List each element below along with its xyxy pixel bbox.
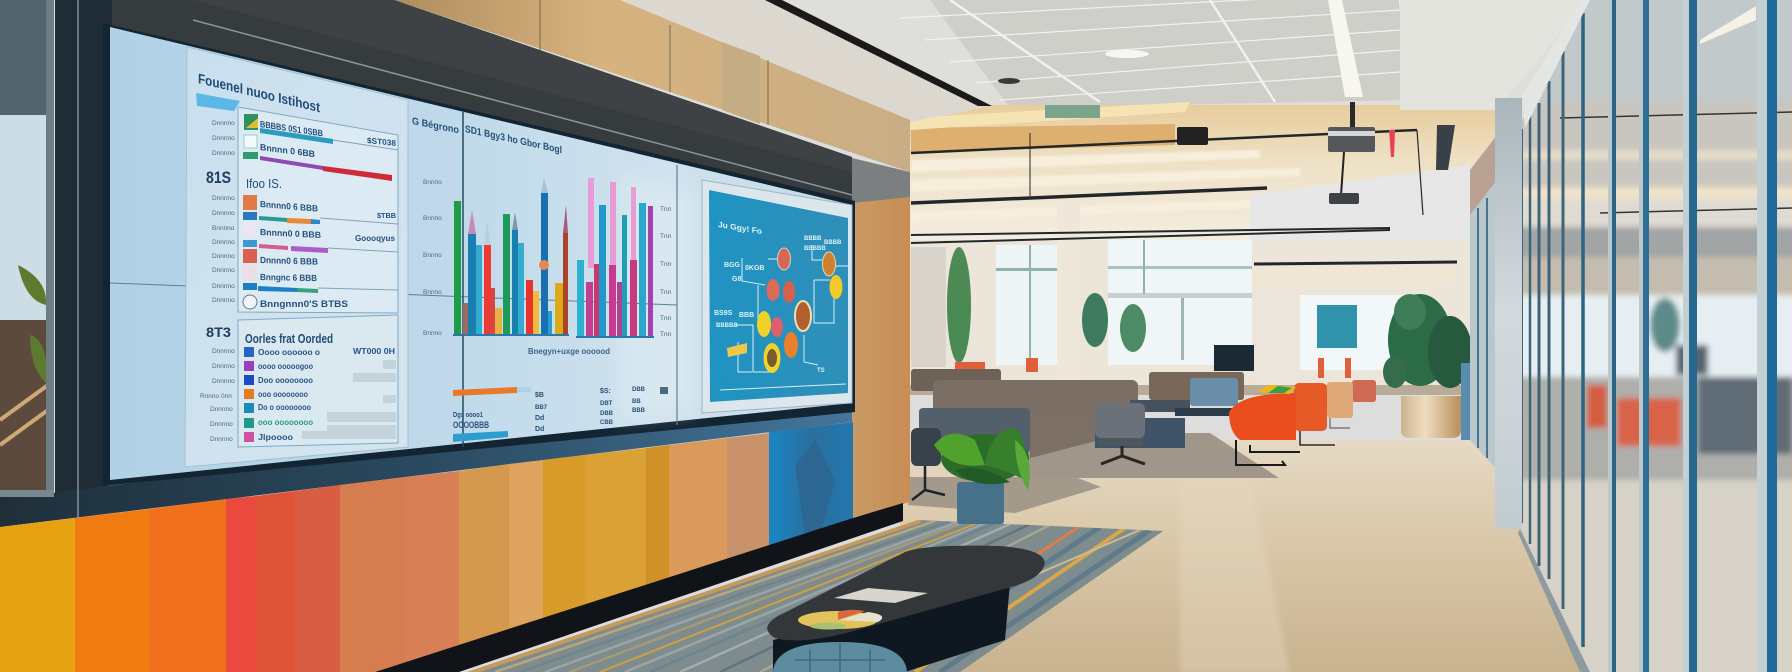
- inset frame: [702, 180, 852, 413]
- inset labels: BBBBB: [804, 246, 826, 252]
- dark chair behind plant: [911, 428, 945, 500]
- panel: process map inset: [702, 180, 852, 413]
- window A: [996, 245, 1057, 365]
- seam: [77, 0, 79, 672]
- y axis labels: Dnnnno: [212, 253, 235, 260]
- row text: $ST038: [367, 136, 397, 148]
- screen seam horizontal: [110, 283, 677, 305]
- axis labels: Tnn: [660, 289, 672, 296]
- heading: card title: Fouenel nuoo Istihost: [198, 71, 320, 116]
- left dark frame: [0, 0, 112, 527]
- y axis labels: Dnnnno: [212, 195, 235, 202]
- back red seats: [955, 358, 1351, 378]
- y axis labels: Dnnnno: [210, 436, 233, 443]
- y axis labels: [200, 120, 235, 443]
- summary light bar: [517, 387, 531, 392]
- floor: [900, 440, 1600, 672]
- bench top: [767, 546, 1045, 640]
- header beam: [1252, 262, 1457, 290]
- ceiling grid panel: [900, 0, 1410, 108]
- glass mullions: [1522, 0, 1777, 672]
- screen seam vertical: [462, 112, 464, 447]
- axis labels: Tnn: [660, 233, 672, 240]
- monitor: [1214, 345, 1254, 371]
- sub card one: [238, 107, 398, 313]
- warm ceiling light bands: [911, 150, 1300, 222]
- red chair back: [1294, 383, 1335, 445]
- blue panel abstract shape: [795, 440, 835, 535]
- tree two: [1120, 304, 1146, 352]
- stair rails: [0, 385, 48, 445]
- summary text: Dgs oooo1: [453, 412, 483, 419]
- lounge rug: [1000, 433, 1279, 478]
- summary text: BB7: [535, 405, 548, 411]
- rug: [460, 515, 1170, 672]
- metal column: [1495, 98, 1522, 529]
- gold planter: [1401, 396, 1461, 438]
- ceiling downlight: [998, 78, 1020, 84]
- dark wall upper band: [55, 0, 852, 205]
- upper right ceiling wash: [1400, 0, 1587, 110]
- legend text: ooo oooooooo: [258, 390, 308, 399]
- y axis labels: Bnnnno: [212, 225, 235, 232]
- legend squares: [244, 347, 254, 442]
- tag: [196, 93, 240, 111]
- inset labels: BGG: [724, 262, 740, 269]
- projector three: [1329, 193, 1359, 204]
- display screen: [103, 23, 855, 486]
- front rug: [908, 477, 1101, 513]
- ceiling: [700, 0, 1792, 130]
- row text: Bnngnnn0'S BTBS: [260, 299, 348, 309]
- row icons: [243, 114, 258, 309]
- inset labels: G8: [732, 276, 741, 283]
- wood column: [852, 197, 910, 518]
- reflected rail lower: [1600, 208, 1792, 213]
- summary text: Dd: [535, 426, 544, 433]
- y axis labels: Dnnnno: [212, 297, 235, 304]
- legend text: Doo oooooooo: [258, 376, 313, 385]
- axis labels: Tnn: [660, 331, 672, 338]
- summary text: DBB: [600, 411, 614, 417]
- inset labels: BBBBB: [716, 323, 738, 329]
- colored wall panels: [0, 422, 853, 672]
- glass bottom rail: [1518, 529, 1590, 672]
- axis labels: Bnnno: [423, 330, 442, 337]
- axis labels: Bnnno: [423, 252, 442, 259]
- summary orange bar: [453, 387, 517, 396]
- axis labels: Tnn: [660, 315, 672, 322]
- salmon wall section: [1470, 135, 1497, 215]
- inset labels: BBBB: [804, 236, 822, 242]
- screen glare: [620, 175, 695, 420]
- summary text: OOOOBBB: [453, 420, 489, 430]
- inset labels: TS: [817, 368, 825, 374]
- row text: BBBBS 0S1 0SBB: [260, 119, 323, 138]
- big figure one: 81S: [206, 168, 231, 187]
- far glass wall: [1470, 180, 1497, 470]
- y axis labels: Dnnnno: [212, 363, 235, 370]
- axis labels: Tnn: [660, 261, 672, 268]
- y axis labels: Dnnnno: [212, 120, 235, 127]
- bars group one: [453, 178, 569, 335]
- summary text: DBT: [600, 401, 613, 407]
- stone column: [911, 247, 946, 367]
- pillar: [1057, 200, 1080, 380]
- row text: [260, 119, 397, 309]
- summary text: $B: [535, 392, 544, 399]
- floor reflection: [1180, 480, 1290, 672]
- axis labels: Bnnno: [423, 179, 442, 186]
- legend text: [258, 347, 395, 442]
- summary text: Dd: [535, 415, 544, 422]
- ceiling spotlight: [1105, 50, 1149, 58]
- chart title two: SD1 Bgy3 ho Gbor Bogl: [465, 124, 562, 156]
- screen bezel: [103, 23, 855, 486]
- row text: Goooqyus: [355, 233, 395, 243]
- back wall and windows: [905, 200, 1495, 395]
- axis labels: [423, 179, 672, 338]
- row heading: Ifoo IS.: [246, 176, 282, 191]
- reflected monitor: [1676, 345, 1708, 375]
- tall plant: [1383, 294, 1472, 388]
- back sofa left: [911, 369, 1001, 391]
- y axis labels: Dnnnno: [212, 135, 235, 142]
- y axis labels: Dnnnno: [212, 348, 235, 355]
- y axis labels: Dnnnno: [212, 239, 235, 246]
- speckled vent: [722, 42, 760, 124]
- y axis labels: Dnnnno: [210, 406, 233, 413]
- y axis labels: Dnnnno: [210, 421, 233, 428]
- screen surface: [110, 27, 852, 480]
- chart caption: Bnegyn+uxge oooood: [528, 347, 610, 356]
- warm back ceiling: [905, 105, 1505, 245]
- heading: sub card two: Oorles frat Oorded: [245, 331, 333, 346]
- axis labels: Bnnno: [423, 215, 442, 222]
- legend text: ooo oooooooo: [258, 418, 313, 427]
- blue stool: [773, 642, 907, 672]
- inset labels: BBBB: [824, 240, 842, 246]
- node circles: [757, 248, 842, 373]
- bench: [767, 546, 1045, 672]
- glass partition wall: [1500, 0, 1792, 672]
- row text: Bnngnc 6 BBB: [260, 272, 317, 283]
- sub card two: [238, 315, 398, 447]
- reflected tree: [1650, 298, 1680, 352]
- legend text: WT000 0H: [353, 347, 395, 356]
- upper soffit beam: [620, 0, 992, 122]
- blue column: [1461, 363, 1472, 440]
- summary text: $S:: [600, 388, 611, 395]
- y axis labels: Dnnnno: [212, 378, 235, 385]
- inset labels: BS9S: [714, 310, 733, 317]
- window B: [1108, 240, 1252, 365]
- glass top frame: [1522, 0, 1590, 128]
- lower dark band: [0, 405, 852, 527]
- bench paper: [834, 588, 928, 603]
- reflected rail: [1560, 112, 1792, 118]
- inset labels: [714, 236, 842, 374]
- far chair: [1352, 380, 1376, 402]
- reflected red chair two: [1617, 398, 1681, 446]
- side table: [1175, 408, 1235, 416]
- summary blue bar: [453, 431, 508, 442]
- cove light and exit sign: [910, 102, 1190, 130]
- panel: bar chart: [412, 116, 672, 442]
- reflected sofa: [1698, 377, 1792, 454]
- row bars: [258, 128, 398, 293]
- grey sectional sofa: [919, 378, 1238, 458]
- back wall white soffit: [1250, 165, 1470, 245]
- row text: $TBB: [377, 211, 397, 220]
- yellow tag: [727, 343, 747, 357]
- summary text: [453, 387, 646, 433]
- summary text: DBB: [632, 387, 646, 393]
- dark ceiling rails: [911, 130, 1457, 264]
- legend text: Jlpoooo: [258, 433, 293, 442]
- projector two: [1328, 102, 1375, 195]
- row text: Bnnnn0 0 BBB: [260, 227, 321, 240]
- pie graphic: [798, 610, 882, 630]
- summary text: BBB: [632, 408, 646, 414]
- back sofa right: [1149, 372, 1244, 400]
- climbing vine: [947, 247, 971, 363]
- axis labels: Tnn: [660, 206, 672, 213]
- connector lines: [720, 245, 850, 390]
- projector one: [1177, 127, 1208, 145]
- wood ceiling strip: [911, 124, 1175, 152]
- row text: Bnnnn0 6 BBB: [260, 199, 318, 214]
- screen seam right: [676, 165, 678, 425]
- row text: Bnnnn 0 6BB: [260, 142, 315, 159]
- ceiling reflection highlights: [1700, 6, 1756, 44]
- bench base: [773, 583, 1010, 672]
- legend value bars: [302, 360, 396, 439]
- y axis labels: Rnnno 0nn: [200, 393, 232, 400]
- window C: [1300, 295, 1425, 370]
- inset labels: 0KGB: [745, 265, 764, 272]
- inset labels: BBB: [739, 312, 754, 319]
- legend text: Oooo oooooo o: [258, 348, 320, 357]
- y axis labels: Dnnnno: [212, 267, 235, 274]
- black ceiling slot: [765, 0, 992, 106]
- chart title: G Bégrono: [412, 116, 459, 136]
- y axis labels: Dnnnno: [212, 283, 235, 290]
- door column: [1256, 290, 1294, 385]
- big figure two: 8T3: [206, 324, 231, 340]
- tree one: [1082, 293, 1108, 347]
- left window: [0, 0, 54, 497]
- black baseboard: [375, 503, 903, 672]
- legend text: Do o oooooooo: [258, 403, 311, 412]
- axis labels: Bnnno: [423, 289, 442, 296]
- reflected red chairs: [1587, 385, 1607, 428]
- row text: Dnnnn0 6 BBB: [260, 255, 318, 267]
- grey cap block: [852, 158, 910, 205]
- y axis labels: Dnnnno: [212, 150, 235, 157]
- summary text: BB: [632, 399, 641, 405]
- summary text: CBB: [600, 420, 614, 426]
- bars group two: [576, 178, 654, 337]
- y axis labels: Dnnnno: [212, 210, 235, 217]
- inset blue field: [709, 190, 848, 402]
- summary small glyph: [660, 387, 668, 394]
- plant foliage: [934, 428, 1030, 490]
- panel: left data card: [185, 47, 408, 467]
- tan chair: [1327, 382, 1353, 428]
- plant pot: [957, 482, 1004, 524]
- red chair front: [1229, 385, 1300, 465]
- red tag: [1389, 130, 1395, 157]
- wall light fixture: [1436, 125, 1455, 170]
- left plant leaves: [18, 265, 48, 385]
- upper wood panels: [394, 0, 910, 172]
- ceiling light strip: [1328, 0, 1363, 97]
- inset title: Ju Ggy! Fo: [718, 220, 762, 236]
- grey chair: [1095, 403, 1145, 464]
- legend text: oooo ooooogoo: [258, 362, 313, 371]
